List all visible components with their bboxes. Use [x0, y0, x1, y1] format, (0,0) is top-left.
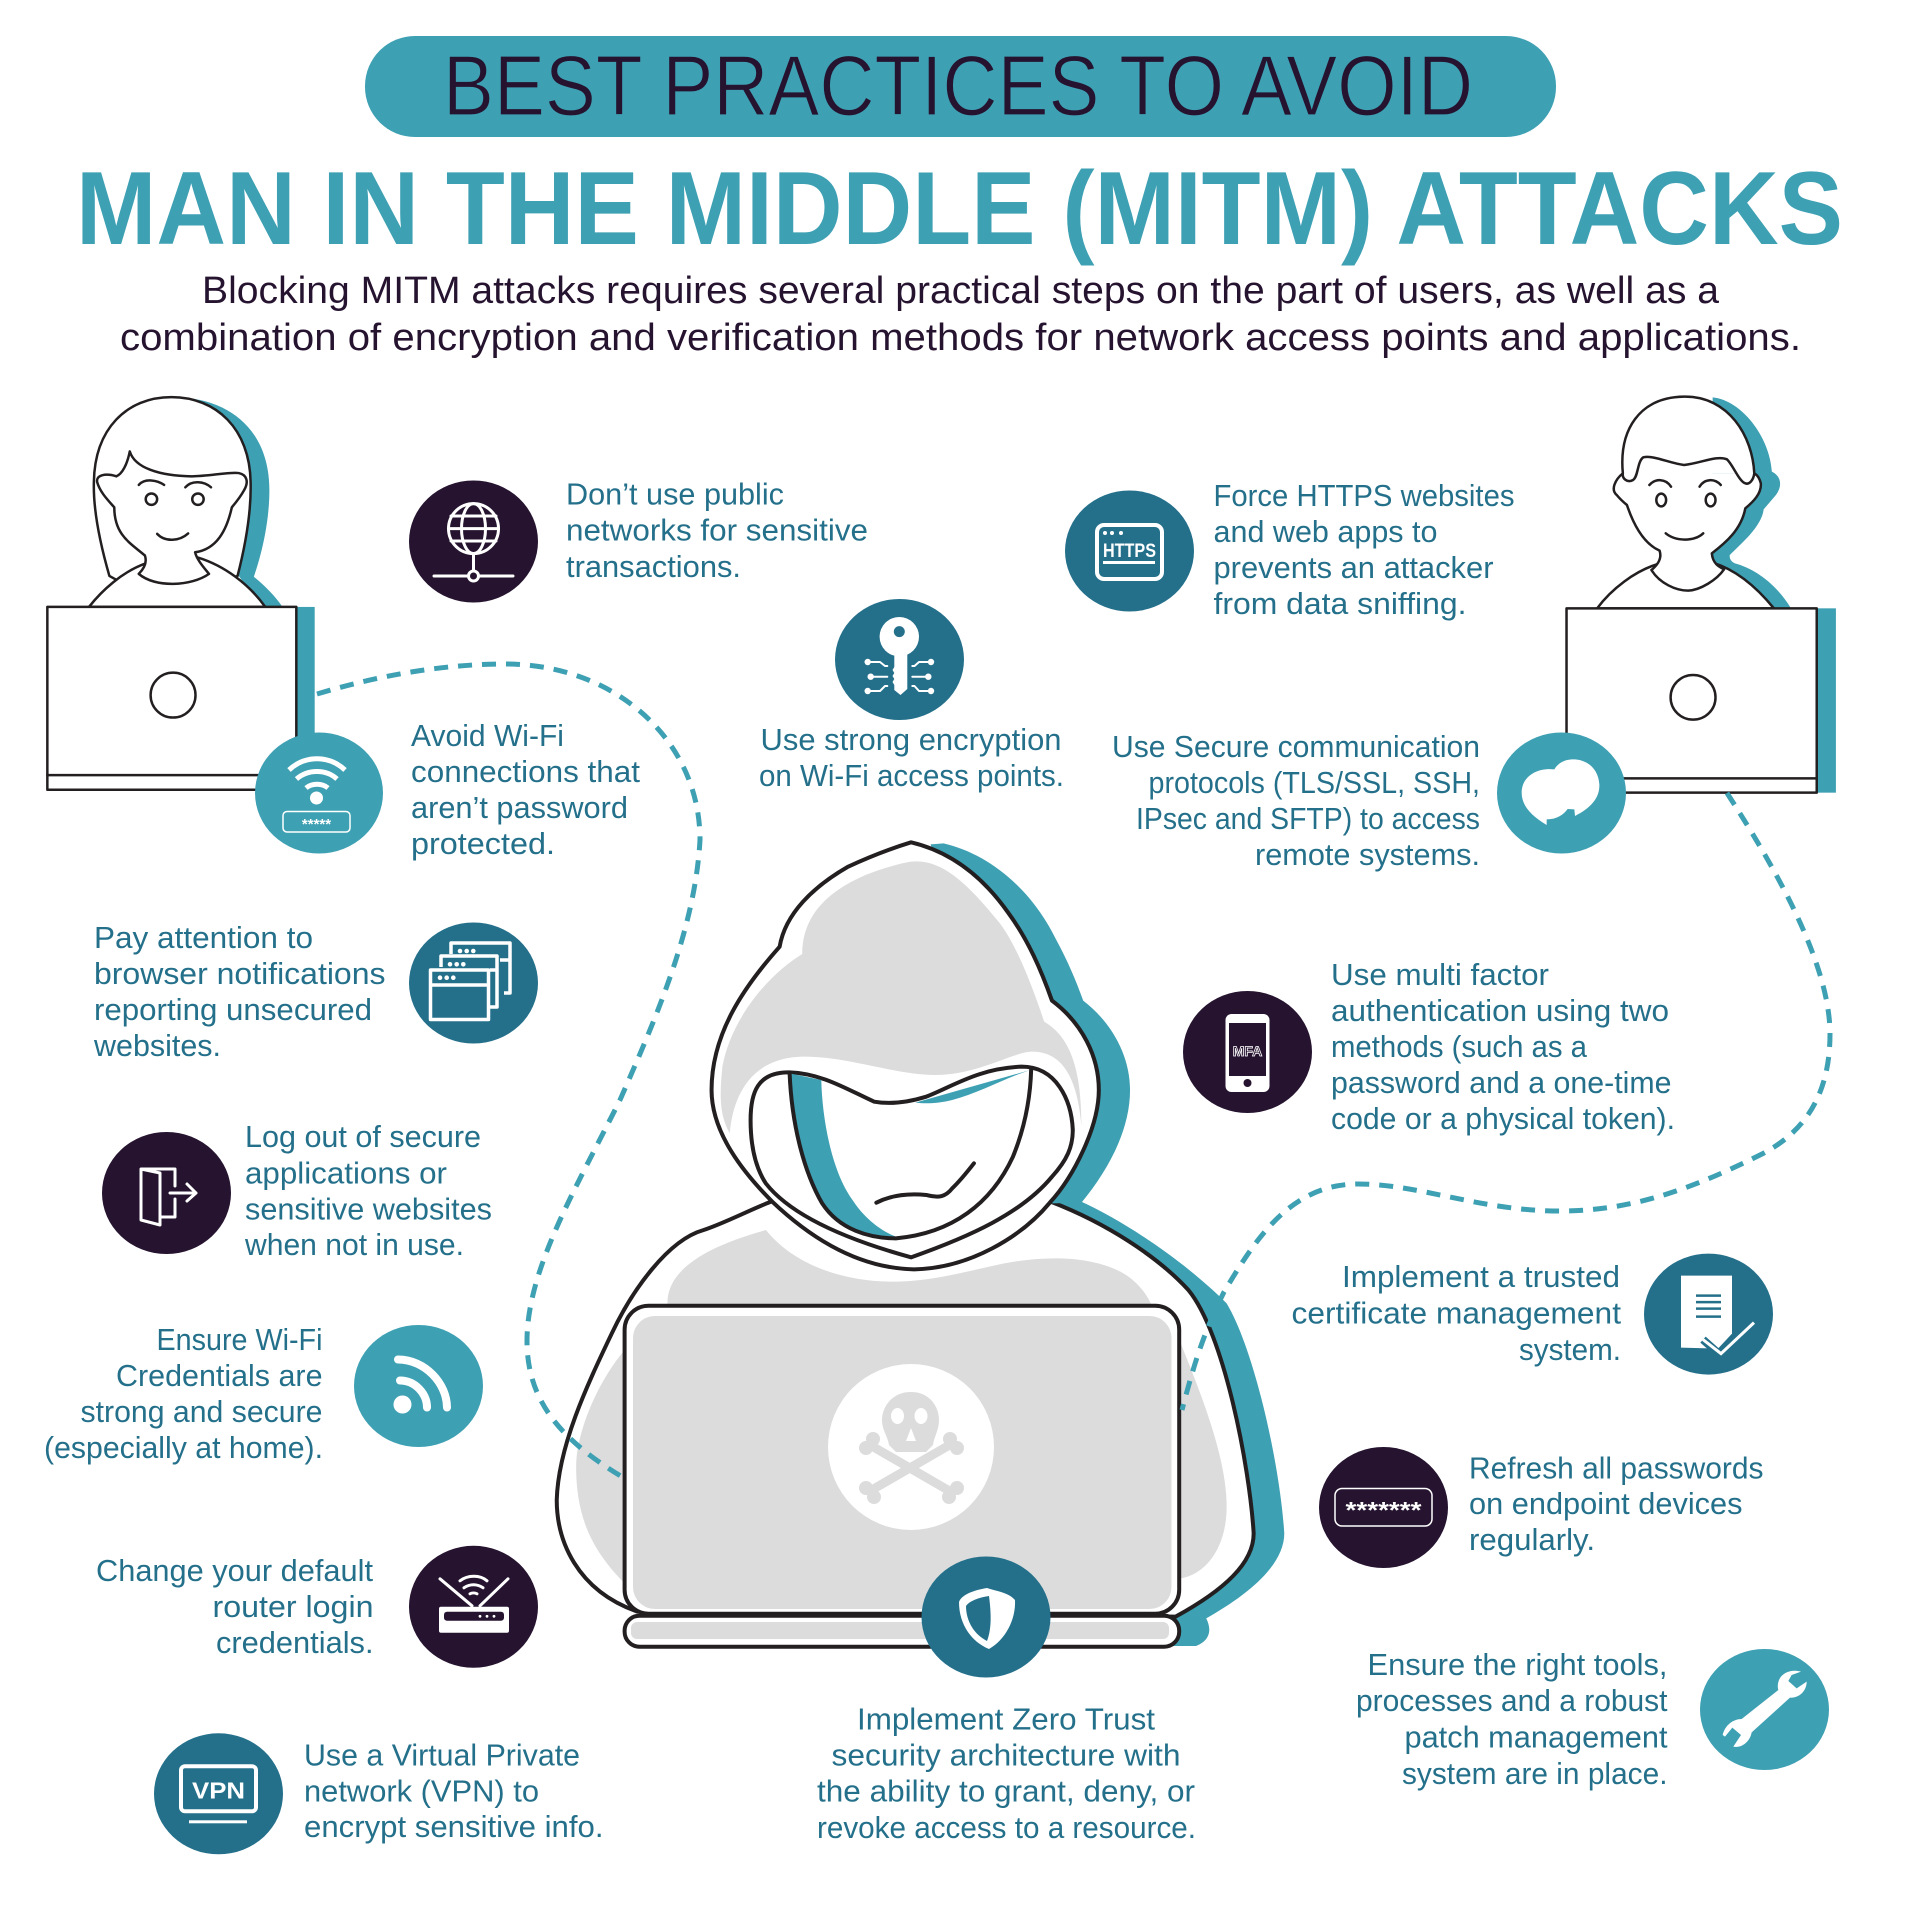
- text: zero trust: the ability to grant, deny, or: [817, 1774, 1195, 1808]
- icon: globe network: [409, 480, 538, 602]
- hacker hood: [712, 842, 1130, 1269]
- text: patch management: system are in place.: [1402, 1756, 1668, 1791]
- item: secure protocols: [1112, 729, 1626, 872]
- text: router login: Change your default: [96, 1553, 373, 1588]
- text: avoid open wifi: Avoid Wi-Fi: [411, 718, 564, 753]
- text: wifi credentials: strong and secure: [80, 1394, 322, 1429]
- text: multi factor authentication: [1331, 957, 1675, 1136]
- text: secure protocols: protocols (TLS/SSL, SSH,: [1148, 765, 1480, 800]
- item: log out: [102, 1119, 492, 1262]
- text: patch management: [1356, 1647, 1668, 1791]
- item: wifi credentials: [44, 1322, 483, 1465]
- icon: wifi password: *****: [302, 816, 331, 833]
- text: secure protocols: [1112, 729, 1480, 872]
- text: VPN: encrypt sensitive info.: [304, 1809, 604, 1844]
- text: multi factor authentication: authentication using two: [1331, 993, 1669, 1028]
- text: strong encryption: Use strong encryption: [760, 722, 1062, 757]
- hacker laptop: [625, 1306, 1179, 1647]
- text: certificate management: certificate management: [1292, 1296, 1621, 1330]
- item: patch management: [1356, 1647, 1829, 1791]
- icon: wifi password: [255, 732, 383, 854]
- icon: VPN monitor: [154, 1733, 283, 1854]
- text: refresh passwords: on endpoint devices: [1469, 1486, 1742, 1521]
- hacker body: [557, 1202, 1284, 1646]
- text: wifi credentials: [44, 1322, 323, 1465]
- text: force HTTPS: and web apps to: [1214, 514, 1438, 549]
- icon: router: [409, 1546, 538, 1668]
- icon: circuit key: [835, 599, 964, 720]
- text: refresh passwords: [1469, 1450, 1764, 1557]
- text: force HTTPS: prevents an attacker: [1214, 550, 1494, 585]
- item: refresh passwords: [1319, 1447, 1764, 1568]
- text: router login: credentials.: [216, 1625, 374, 1660]
- item: avoid open wifi: [255, 718, 640, 861]
- text: zero trust: revoke access to a resource.: [817, 1810, 1196, 1845]
- text: log out: Log out of secure: [245, 1119, 481, 1154]
- text: zero trust: [817, 1702, 1196, 1845]
- text: browser notifications: reporting unsecured: [94, 992, 372, 1027]
- text: patch management: Ensure the right tools,: [1368, 1647, 1668, 1682]
- text: patch management: patch management: [1404, 1720, 1668, 1754]
- text: public networks: Don’t use public: [566, 476, 784, 512]
- icon: speech bubbles: [1497, 732, 1626, 854]
- icon: stacked browser windows: [409, 922, 538, 1044]
- text: log out: applications or: [245, 1156, 447, 1190]
- text: avoid open wifi: aren’t password: [411, 790, 628, 825]
- text: force HTTPS: from data sniffing.: [1214, 586, 1466, 621]
- item: VPN: [154, 1733, 604, 1854]
- text: browser notifications: [93, 920, 386, 1063]
- text: VPN: Use a Virtual Private: [304, 1738, 580, 1772]
- icon: certificate page: [1644, 1254, 1773, 1375]
- text: refresh passwords: regularly.: [1469, 1522, 1595, 1557]
- text: multi factor authentication: code or a physical token).: [1331, 1101, 1675, 1136]
- text: certificate management: Implement a trusted: [1342, 1259, 1620, 1294]
- item: public networks: [409, 476, 868, 602]
- figure: man with laptop: [1567, 397, 1836, 793]
- icon: wrench: [1700, 1649, 1829, 1770]
- icon: password field: *******: [1346, 1497, 1422, 1523]
- text: refresh passwords: Refresh all passwords: [1469, 1450, 1764, 1486]
- text: multi factor authentication: methods (such as a: [1331, 1029, 1588, 1064]
- text: browser notifications: websites.: [93, 1028, 221, 1063]
- icon: HTTPS window: HTTPS: [1103, 541, 1156, 562]
- text: patch management: processes and a robust: [1356, 1683, 1668, 1718]
- text: browser notifications: browser notifications: [94, 956, 386, 991]
- text: secure protocols: remote systems.: [1255, 837, 1480, 872]
- item: router login: [96, 1546, 538, 1668]
- text: wifi credentials: Credentials are: [116, 1358, 322, 1393]
- item: force HTTPS: [1065, 478, 1514, 621]
- text: zero trust: security architecture with: [832, 1738, 1180, 1772]
- text: wifi credentials: (especially at home).: [44, 1430, 323, 1465]
- icon: exit door: [102, 1132, 231, 1254]
- intro text: Blocking MITM attacks requires several practical steps on the part of users, as well as a: [202, 270, 1720, 312]
- text: multi factor authentication: password and a one-time: [1331, 1065, 1672, 1100]
- title banner: BEST PRACTICES TO AVOID: [443, 39, 1473, 134]
- item: multi factor authentication: [1183, 957, 1675, 1136]
- text: certificate management: system.: [1519, 1332, 1621, 1367]
- icon: password field: [1319, 1447, 1448, 1568]
- text: certificate management: [1292, 1259, 1621, 1367]
- intro text: combination of encryption and verification methods for network access points and applications.: [120, 317, 1801, 359]
- icon: skull and crossbones: [859, 1392, 964, 1504]
- text: log out: when not in use.: [244, 1227, 464, 1262]
- figure: hooded hacker with laptop: [557, 842, 1284, 1647]
- text: wifi credentials: Ensure Wi-Fi: [156, 1322, 322, 1357]
- text: public networks: transactions.: [566, 549, 741, 584]
- item: strong encryption: [759, 599, 1064, 793]
- text: browser notifications: Pay attention to: [94, 920, 313, 955]
- text: log out: sensitive websites: [245, 1192, 492, 1226]
- text: force HTTPS: [1214, 478, 1514, 621]
- intro text: [120, 270, 1801, 359]
- text: router login: [96, 1553, 374, 1660]
- text: zero trust: Implement Zero Trust: [857, 1702, 1155, 1736]
- icon: signal arcs: [354, 1325, 483, 1447]
- text: secure protocols: Use Secure communication: [1112, 729, 1480, 764]
- text: avoid open wifi: protected.: [411, 826, 555, 861]
- icon: VPN monitor: VPN: [192, 1777, 245, 1803]
- text: router login: router login: [212, 1589, 374, 1624]
- item: browser notifications: [93, 920, 538, 1063]
- text: multi factor authentication: Use multi factor: [1331, 957, 1549, 992]
- text: public networks: [566, 476, 868, 584]
- text: avoid open wifi: connections that: [411, 754, 640, 789]
- connector: dashed line from right user to hacker: [1182, 793, 1830, 1410]
- text: avoid open wifi: [411, 718, 640, 861]
- text: force HTTPS: Force HTTPS websites: [1214, 478, 1514, 513]
- text: strong encryption: [759, 722, 1064, 793]
- text: VPN: network (VPN) to: [304, 1774, 539, 1808]
- figure: woman with laptop: [47, 397, 315, 790]
- text: public networks: networks for sensitive: [566, 512, 868, 548]
- icon: MFA phone: [1183, 991, 1312, 1113]
- icon: MFA phone: MFA: [1233, 1043, 1262, 1059]
- connector: dashed line from left user to hacker: [317, 664, 700, 1478]
- text: secure protocols: IPsec and SFTP) to access: [1136, 801, 1480, 836]
- text: VPN: [304, 1738, 604, 1844]
- icon: HTTPS window: [1065, 490, 1194, 612]
- item: zero trust: [817, 1556, 1196, 1845]
- text: strong encryption: on Wi-Fi access points.: [759, 758, 1064, 793]
- text: log out: [244, 1119, 492, 1262]
- icon: shield: [922, 1556, 1050, 1678]
- item: certificate management: [1292, 1254, 1773, 1375]
